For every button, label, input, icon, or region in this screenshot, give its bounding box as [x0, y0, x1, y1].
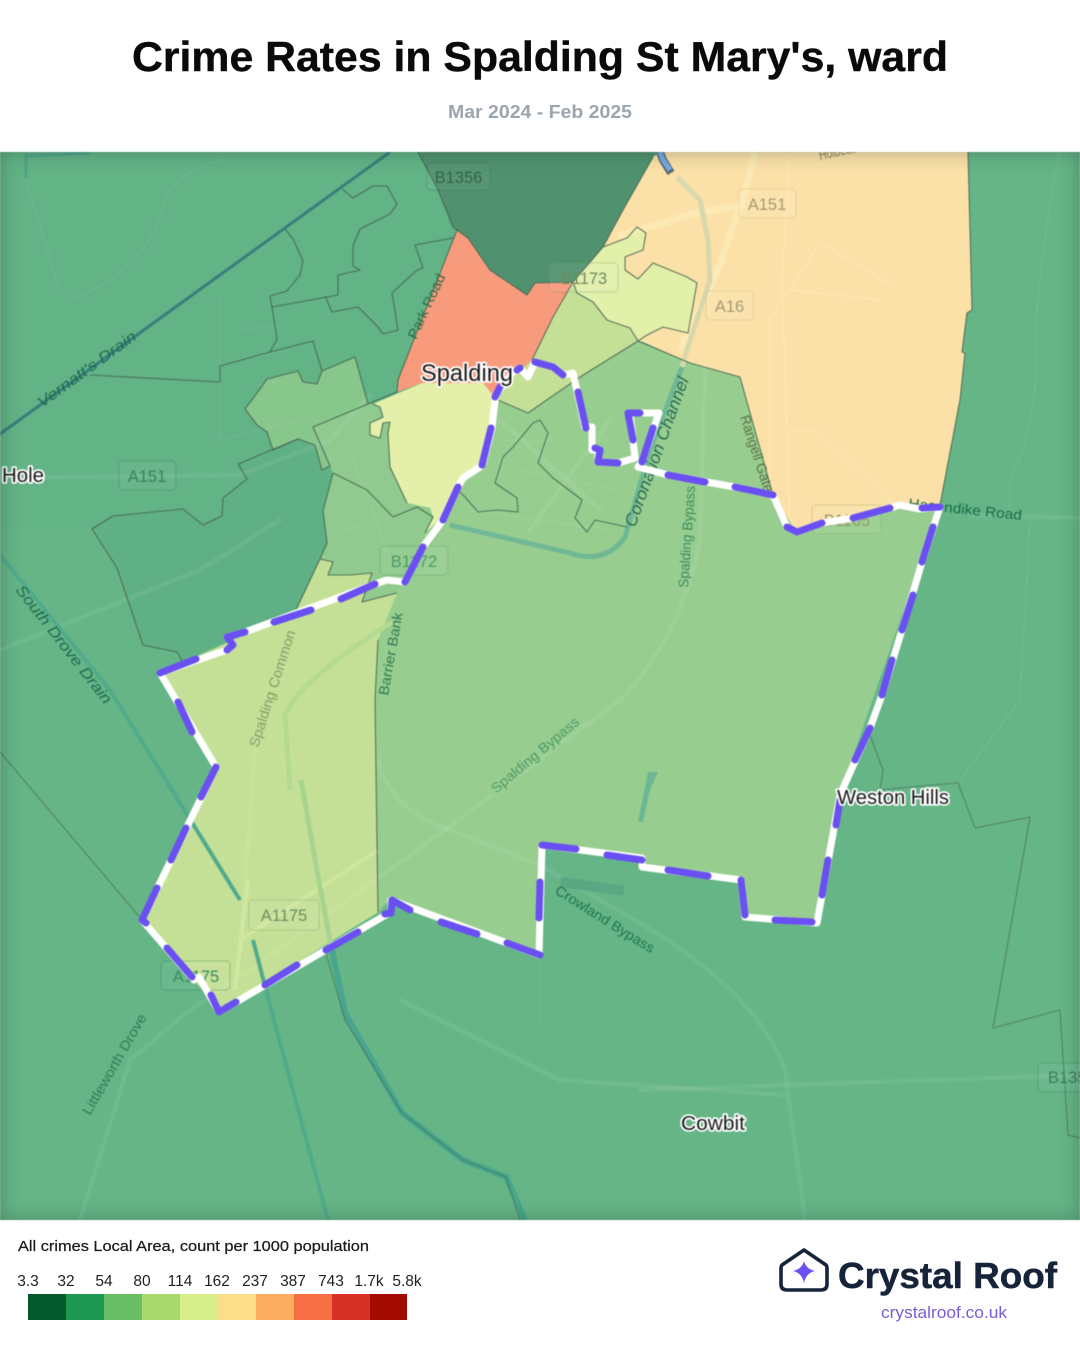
yellow-green central area [493, 282, 638, 413]
place: Weston Hills: Weston Hills [837, 787, 949, 809]
legend scale values: 743 [318, 1273, 344, 1290]
shield: B1356 [427, 163, 490, 190]
label: Littleworth Drove: Littleworth Drove [79, 1011, 150, 1118]
place: Cowbit: Cowbit [681, 1113, 745, 1135]
shield: A1175 south [161, 961, 230, 990]
label: Spalding Bypass south: Spalding Bypass [488, 713, 582, 796]
website link: crystalroof.co.uk [881, 1304, 1008, 1322]
label: Coronation Channel: Coronation Channel [621, 373, 693, 529]
legend scale values: 80 [133, 1273, 151, 1290]
label: South Drove Drain: South Drove Drain [12, 582, 115, 708]
shield: A16 [706, 291, 753, 320]
shield: A16: A16 [715, 298, 744, 316]
legend scale values: 54 [95, 1273, 113, 1290]
label: Rangell Gate: Rangell Gate [737, 413, 777, 494]
place: Spalding: Spalding [421, 360, 513, 387]
label: Park Road: Park Road [404, 271, 448, 341]
water feature: Vernatt's Drain [0, 152, 390, 434]
shield: B1357 [1038, 1063, 1080, 1092]
light green north-east pocket [573, 227, 697, 341]
subtitle: date range: Mar 2024 - Feb 2025 [448, 101, 632, 122]
shield: A1175 south: A1175 [173, 968, 219, 986]
ward boundary outline [142, 362, 940, 1012]
water feature: small pond [638, 772, 658, 822]
shield: B1173 [549, 263, 618, 292]
shield: A151 north: A151 [748, 196, 786, 214]
label: Vernatt's Drain: Vernatt's Drain [34, 328, 140, 411]
label: Spalding Bypass north: Spalding Bypass [675, 485, 698, 588]
legend scale values: 32 [57, 1273, 75, 1290]
pale yellow central area [370, 383, 498, 533]
label: Spalding Common: Spalding Common [246, 628, 299, 749]
place: Hole: Hole [2, 465, 44, 487]
map edge vignette [0, 152, 1080, 1220]
shield: B1172: B1172 [391, 553, 437, 571]
shield: A151 west: A151 [128, 468, 166, 486]
boundary purple dashes [142, 362, 940, 1012]
legend scale values [17, 1273, 422, 1290]
wordmark: Crystal Roof [838, 1255, 1058, 1296]
place labels [2, 360, 949, 1135]
title: Crime Rates in Spalding St Mary's, ward [132, 33, 948, 80]
water feature: river at top [660, 152, 671, 173]
selected ward green area [375, 341, 940, 955]
shield: B1172 [380, 546, 448, 575]
legend scale values: 114 [168, 1273, 193, 1290]
LSOA boundaries [0, 152, 1080, 1220]
road shields [119, 163, 1080, 1092]
shield: B1165 [812, 505, 881, 534]
boundary white base [142, 362, 940, 1012]
legend scale values: 237 [242, 1273, 268, 1290]
label: Barrier Bank: Barrier Bank [375, 610, 406, 697]
north-west low crime area [0, 152, 457, 529]
legend scale values: 3.3 [17, 1273, 39, 1290]
legend title: All crimes Local Area, count per 1000 population [18, 1238, 369, 1255]
road curves in the western ward [285, 622, 392, 790]
mid green western LSOA [313, 404, 433, 602]
pale orange east area [603, 152, 972, 533]
legend [17, 1238, 422, 1320]
road and water labels [12, 138, 1023, 1117]
logo: Crystal Roof [779, 1248, 1058, 1322]
west darker LSOA [92, 439, 333, 661]
faint roads [0, 365, 1080, 1220]
shield: A1175 ward [249, 900, 319, 930]
legend colour bar [28, 1294, 407, 1320]
shield: B1356: B1356 [435, 169, 482, 187]
label: Crowland Bypass: Crowland Bypass [552, 882, 658, 956]
western yellow-green ward area [142, 559, 402, 1010]
water feature: Coronation Channel [450, 367, 682, 557]
choropleth map panel [0, 151, 1080, 1221]
mid green north-west LSOA [245, 357, 368, 470]
salmon town centre area [397, 230, 573, 395]
shield: A1175 ward: A1175 [261, 907, 307, 925]
shield: B1165: B1165 [824, 512, 870, 530]
water feature: South Drove Drain [0, 555, 328, 1220]
shield: B1173: B1173 [561, 270, 607, 288]
water feature: top-left drain [26, 153, 90, 178]
legend scale values: 162 [204, 1273, 230, 1290]
shield: A151 west [119, 461, 176, 490]
road in the pale orange area [618, 152, 755, 350]
legend scale values: 5.8k [392, 1273, 422, 1290]
legend scale values: 387 [280, 1273, 306, 1290]
icon: house with star [781, 1250, 827, 1290]
dark green north area [418, 152, 660, 295]
water feature: southern drain [301, 780, 332, 950]
legend scale values: 1.7k [354, 1273, 384, 1290]
label: Hasendike Road: Hasendike Road [908, 495, 1023, 523]
map base area [0, 152, 1080, 1220]
shield: A151 north [739, 189, 796, 218]
